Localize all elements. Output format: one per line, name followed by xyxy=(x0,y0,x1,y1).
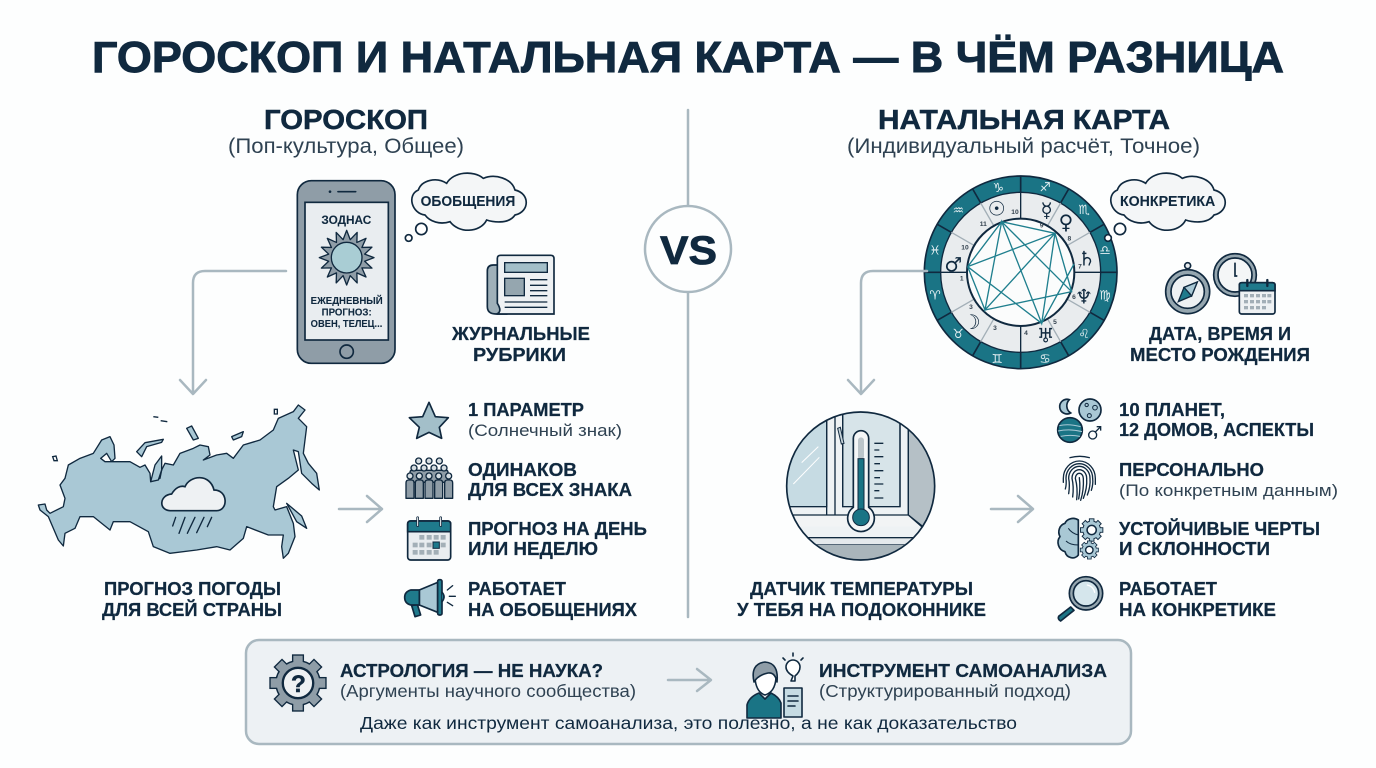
text: one parameter: (Солнечный знак) xyxy=(468,421,622,440)
arrow: chart to thermometer xyxy=(848,271,927,394)
text: self-analysis tool: ИНСТРУМЕНТ САМОАНАЛИЗА xyxy=(819,660,1107,681)
thought bubble: generalisations: ОБОБЩЕНИЯ xyxy=(421,194,515,210)
text: same for all signs xyxy=(468,459,632,500)
icon: smartphone: ПРОГНОЗ: xyxy=(322,307,372,318)
icon: smartphone: ЗОДНАС xyxy=(321,213,371,227)
icon: star xyxy=(409,402,448,438)
icon: crowd xyxy=(406,458,453,498)
text: astrology not a science: (Аргументы научного сообщества) xyxy=(340,681,636,701)
icon: compass, clock and calendar xyxy=(1166,254,1275,314)
label: magazine columns: РУБРИКИ xyxy=(473,344,566,365)
text: one parameter: 1 ПАРАМЕТР xyxy=(468,399,584,420)
label: forecast for the whole country: ПРОГНОЗ ПОГОДЫ xyxy=(104,578,281,599)
text: forecast for day or week: ПРОГНОЗ НА ДЕНЬ xyxy=(468,518,647,539)
text: ten planets: 12 ДОМОВ, АСПЕКТЫ xyxy=(1119,419,1314,440)
icon: planets xyxy=(1058,399,1101,442)
natal chart wheel: 10 xyxy=(961,245,969,252)
natal chart wheel: ♊ xyxy=(992,351,1003,366)
natal chart wheel: ☿ xyxy=(1041,198,1053,222)
text: stable traits xyxy=(1119,518,1320,559)
label: temperature sensor: ДАТЧИК ТЕМПЕРАТУРЫ xyxy=(750,578,973,599)
arrow: thermometer to list xyxy=(991,496,1033,522)
icon: smartphone xyxy=(297,181,395,363)
natal chart wheel: ♉ xyxy=(953,326,964,341)
text: same for all signs: ОДИНАКОВ xyxy=(468,459,577,480)
natal chart wheel: ♐ xyxy=(1039,179,1051,194)
natal chart wheel: ♂ xyxy=(944,253,962,277)
natal chart wheel: 3 xyxy=(969,304,973,311)
heading: natal chart: НАТАЛЬНАЯ КАРТА xyxy=(878,104,1170,135)
text: stable traits: УСТОЙЧИВЫЕ ЧЕРТЫ xyxy=(1119,518,1320,539)
text: stable traits: И СКЛОННОСТИ xyxy=(1119,538,1270,559)
natal chart wheel: 4 xyxy=(1024,330,1028,337)
thought bubble: specifics xyxy=(1105,173,1225,241)
divider with VS badge: VS xyxy=(660,229,717,273)
thought bubble: generalisations xyxy=(405,173,526,241)
label: temperature sensor xyxy=(737,578,986,620)
natal chart wheel: ☽ xyxy=(963,310,981,334)
text: astrology not a science: АСТРОЛОГИЯ — НЕ НАУКА? xyxy=(340,660,603,681)
natal chart wheel: ☉ xyxy=(988,197,1006,221)
text: works on specifics: НА КОНКРЕТИКЕ xyxy=(1119,599,1276,620)
panel: natal chart xyxy=(737,104,1338,621)
text: works on specifics xyxy=(1119,578,1276,620)
text: works on generalisations: НА ОБОБЩЕНИЯХ xyxy=(468,599,638,620)
text: one parameter xyxy=(468,399,622,440)
text: self-analysis tool xyxy=(819,660,1107,701)
label: date, time and birthplace: МЕСТО РОЖДЕНИЯ xyxy=(1130,344,1310,365)
text: conclusion: Даже как инструмент самоанализа, это полезно, а не как доказательство xyxy=(360,713,1017,733)
subheading: natal chart: (Индивидуальный расчёт, Точное) xyxy=(847,135,1200,158)
arrow: map to list xyxy=(339,496,382,522)
natal chart wheel: 6 xyxy=(1072,294,1076,301)
icon: person with idea and notebook xyxy=(747,653,803,718)
text: forecast for day or week xyxy=(468,518,647,559)
icon: newspaper xyxy=(487,255,554,314)
icon: brain and gears xyxy=(1058,518,1102,559)
label: date, time and birthplace: ДАТА, ВРЕМЯ И xyxy=(1149,323,1291,344)
natal chart wheel: ♅ xyxy=(1037,323,1055,347)
heading: horoscope: ГОРОСКОП xyxy=(264,104,428,135)
natal chart wheel: ♓ xyxy=(929,243,941,258)
map: weather over Russia xyxy=(38,405,319,558)
thought bubble: specifics: КОНКРЕТИКА xyxy=(1120,194,1216,210)
natal chart wheel: 9 xyxy=(1040,222,1044,229)
natal chart wheel: 10 xyxy=(1011,209,1019,216)
list: natal chart traits xyxy=(1058,399,1338,621)
text: personal: ПЕРСОНАЛЬНО xyxy=(1119,459,1264,480)
label: temperature sensor: У ТЕБЯ НА ПОДОКОННИКЕ xyxy=(737,599,986,620)
natal chart wheel: ♎ xyxy=(1099,243,1111,258)
text: self-analysis tool: (Структурированный подход) xyxy=(819,681,1071,701)
natal chart wheel: ♀ xyxy=(1059,210,1073,234)
text: forecast for day or week: ИЛИ НЕДЕЛЮ xyxy=(468,538,598,559)
natal chart wheel xyxy=(924,176,1117,369)
icon: gear with question mark xyxy=(271,656,325,710)
label: magazine columns: ЖУРНАЛЬНЫЕ xyxy=(451,323,590,344)
divider with VS badge xyxy=(645,110,731,617)
subheading: horoscope: (Поп-культура, Общее) xyxy=(228,135,464,158)
natal chart wheel: 5 xyxy=(1053,319,1057,326)
label: magazine columns xyxy=(451,323,590,365)
natal chart wheel: 3 xyxy=(993,325,997,332)
natal chart wheel: ♋ xyxy=(1039,351,1051,366)
natal chart wheel: 11 xyxy=(980,221,987,228)
arrow: phone to map xyxy=(180,271,286,394)
panel: bottom conclusion xyxy=(246,640,1131,744)
text: ten planets: 10 ПЛАНЕТ, xyxy=(1119,399,1225,420)
natal chart wheel: ♒ xyxy=(953,203,964,218)
text: personal: (По конкретным данным) xyxy=(1119,481,1338,500)
text: works on generalisations: РАБОТАЕТ xyxy=(468,578,567,599)
text: same for all signs: ДЛЯ ВСЕХ ЗНАКА xyxy=(468,479,632,500)
natal chart wheel: ♑ xyxy=(993,180,1004,195)
icon: fingerprint xyxy=(1063,456,1095,500)
natal chart wheel: ♆ xyxy=(1075,284,1093,308)
natal chart wheel: ♏ xyxy=(1078,202,1090,217)
icon: smartphone: ОВЕН, ТЕЛЕЦ... xyxy=(311,319,382,330)
text: astrology not a science xyxy=(340,660,636,701)
natal chart wheel: ♍ xyxy=(1099,288,1111,303)
natal chart wheel: ♌ xyxy=(1078,326,1090,341)
natal chart wheel: 1 xyxy=(960,276,964,283)
icon: calendar xyxy=(408,518,451,560)
text: ten planets xyxy=(1119,399,1314,440)
icon: magnifier xyxy=(1058,577,1103,621)
label: forecast for the whole country xyxy=(102,578,282,620)
label: date, time and birthplace xyxy=(1130,323,1310,365)
natal chart wheel: 8 xyxy=(1067,236,1071,243)
arrow: astrology to self-analysis xyxy=(668,669,711,691)
panel: horoscope xyxy=(38,104,647,620)
natal chart wheel: 7 xyxy=(1078,263,1082,270)
icon: thermometer on window sill xyxy=(786,411,936,561)
natal chart wheel: ♄ xyxy=(1078,247,1096,271)
text: personal xyxy=(1119,459,1338,500)
text: works on specifics: РАБОТАЕТ xyxy=(1119,578,1218,599)
list: horoscope traits xyxy=(405,399,647,620)
natal chart wheel: ♈ xyxy=(929,288,941,303)
label: forecast for the whole country: ДЛЯ ВСЕЙ СТРАНЫ xyxy=(102,599,282,620)
text: works on generalisations xyxy=(468,578,638,620)
title: ГОРОСКОП И НАТАЛЬНАЯ КАРТА — В ЧЁМ РАЗНИЦА xyxy=(92,34,1284,82)
icon: smartphone: ЕЖЕДНЕВНЫЙ xyxy=(311,294,383,307)
icon: megaphone xyxy=(405,580,455,617)
icon: gear with question mark: ? xyxy=(291,671,306,698)
